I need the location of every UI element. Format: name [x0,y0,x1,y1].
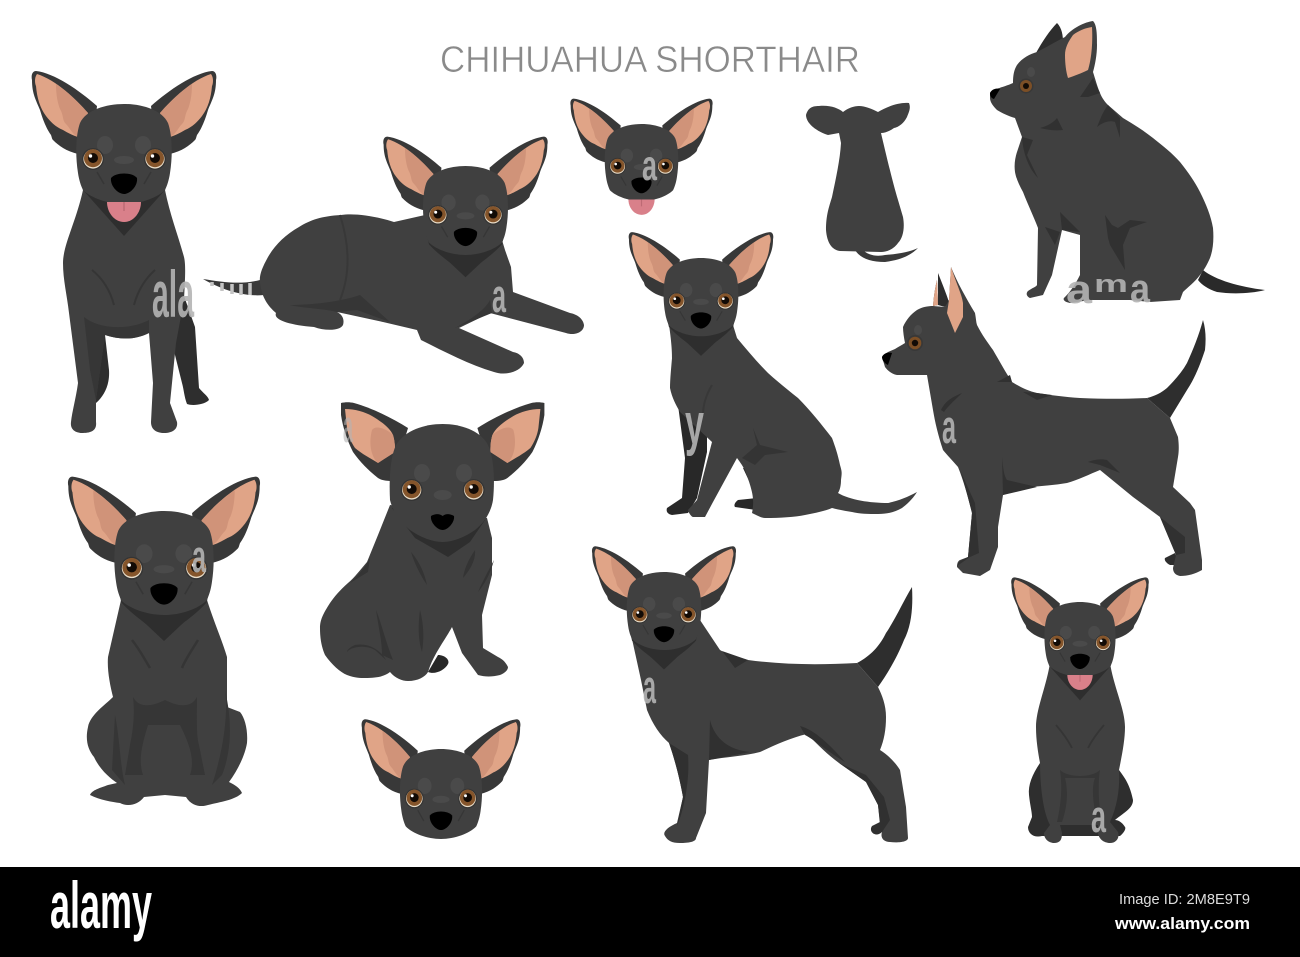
dog: small sitting front with tongue [1011,577,1149,843]
watermark letters: a [192,531,207,582]
watermark letters: y [685,392,704,457]
watermark letters [152,142,1151,842]
dog: standing three quarter [592,546,912,843]
dog: sitting front, large [68,477,260,806]
head: small with tongue [570,99,713,215]
dog: standing side, right [882,267,1206,576]
dog: standing front with tongue [32,71,216,433]
title: CHIHUAHUA SHORTHAIR [440,38,860,80]
watermark letters: a [1091,791,1107,842]
dog: sitting side, looking left [990,21,1265,303]
dog: puppy sitting [320,402,544,681]
website: www.alamy.com [1114,914,1250,933]
alamy logo: alamy [50,868,152,942]
watermark letters: ala [152,257,195,331]
watermark letters: a [643,660,656,713]
dog: seen from behind [806,103,918,262]
watermark letters: a [942,400,956,453]
watermark letters: a [343,401,353,452]
dog: lying down [203,137,584,374]
watermark letters: a [1130,267,1151,311]
watermark letters: a [642,142,658,190]
image id: Image ID: 2M8E9T9 [1119,891,1250,908]
dog: sitting three quarter, tail right [629,232,917,518]
watermark letters: a [492,269,506,322]
watermark letters: a [1066,268,1093,312]
watermark letters: m [1094,271,1128,298]
footer bar [0,867,1300,957]
head: bottom centre [362,719,520,839]
